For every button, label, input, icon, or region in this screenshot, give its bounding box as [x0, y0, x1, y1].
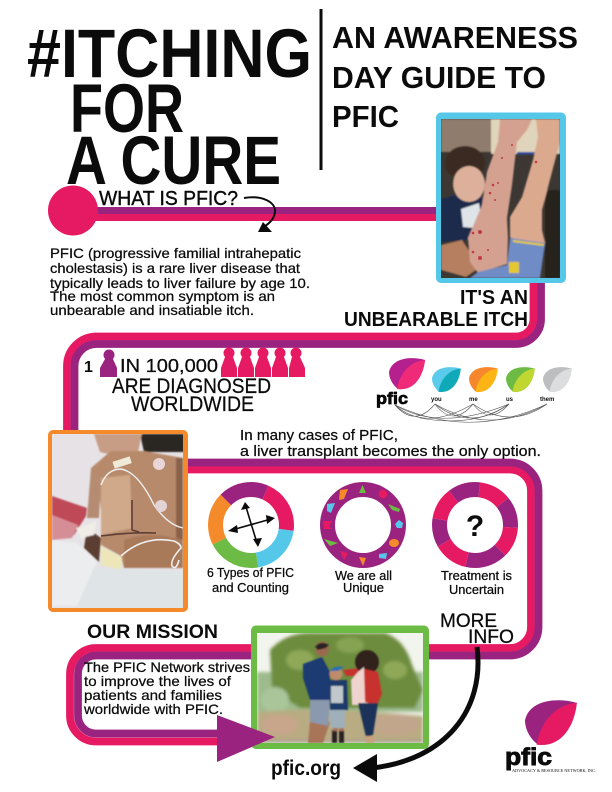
ring: 6 types: 6 Types of PFIC	[207, 566, 294, 580]
subtitle: AN AWARENESS	[332, 20, 578, 55]
text block: PFIC description: cholestasis) is a rare liver disease that	[50, 260, 300, 276]
text block: PFIC description	[50, 245, 310, 318]
statistic: 1 in 100,000: IN 100,000	[120, 356, 218, 376]
heading: it's an unbearable itch: UNBEARABLE ITCH	[344, 309, 528, 331]
logo: PFIC you me us them: pfic	[376, 389, 408, 408]
icon: purple person	[100, 350, 117, 377]
statistic: 1 in 100,000	[84, 348, 305, 416]
subtitle: PFIC	[332, 99, 399, 134]
ring: treatment is uncertain: Treatment is	[441, 569, 512, 583]
heading: more info: INFO	[468, 627, 514, 648]
ring: 6 types: and Counting	[212, 581, 289, 595]
statistic: 1 in 100,000: ARE DIAGNOSED	[112, 375, 271, 398]
ring: treatment is uncertain: Uncertain	[449, 583, 504, 597]
statistic: 1 in 100,000: 1	[84, 359, 93, 376]
logo: PFIC you me us them	[376, 358, 572, 422]
text block: transplant: In many cases of PFIC,	[240, 427, 398, 444]
ribbon: what is PFIC to first photo	[48, 186, 438, 236]
ring: we are all unique: We are all	[335, 569, 392, 583]
heading: what is PFIC: WHAT IS PFIC?	[99, 188, 238, 210]
text block: transplant: a liver transplant becomes the only option.	[240, 443, 541, 460]
statistic: 1 in 100,000: WORLDWIDE	[131, 393, 254, 416]
photo: boy with itchy legs	[436, 112, 566, 283]
logo: PFIC Advocacy and Resource Network	[505, 700, 596, 774]
arrow: ribbon arrowhead	[217, 715, 275, 762]
logo: PFIC Advocacy and Resource Network: ADVOCACY & RESOURCE NETWORK, INC.	[512, 768, 596, 774]
link: pfic.org: pfic.org	[271, 757, 341, 780]
heading: more info	[440, 611, 514, 648]
text block: mission: to improve the lives of	[84, 673, 231, 689]
subtitle	[332, 20, 578, 134]
ring: we are all unique	[323, 485, 403, 595]
heading: our mission: OUR MISSION	[87, 622, 218, 643]
ring: 6 types	[207, 490, 294, 595]
text block: PFIC description: unbearable and insatiable itch.	[50, 302, 254, 318]
heading: it's an unbearable itch: IT'S AN	[460, 287, 528, 309]
text block: transplant	[240, 427, 541, 460]
ring: we are all unique: Unique	[343, 581, 384, 595]
title: A CURE	[66, 122, 281, 199]
logo: PFIC Advocacy and Resource Network: pfic	[505, 744, 552, 771]
logo: PFIC you me us them: us	[506, 397, 514, 403]
text block: mission: The PFIC Network strives	[84, 659, 250, 675]
photo: child after liver transplant	[48, 430, 188, 612]
ring: treatment is uncertain: ?	[466, 510, 484, 543]
title: #ITCHING	[27, 15, 312, 92]
text block: PFIC description: typically leads to liver failure by age 10.	[50, 275, 310, 291]
title: FOR	[70, 70, 184, 147]
arrow: more info to pfic.org	[353, 647, 478, 782]
text block: PFIC description: The most common symptom is an	[50, 288, 275, 304]
icon: crossed arrows	[228, 502, 275, 547]
title	[27, 15, 312, 199]
logo: PFIC you me us them: them	[540, 397, 554, 403]
heading: more info: MORE	[440, 611, 497, 632]
text block: mission	[83, 659, 250, 717]
logo: PFIC you me us them: you	[431, 397, 442, 403]
heading: it's an unbearable itch	[344, 287, 528, 331]
ring: treatment is uncertain	[440, 490, 512, 597]
text block: PFIC description: PFIC (progressive familial intrahepatic	[50, 245, 301, 261]
ribbon: second photo to family photo and arrow	[70, 462, 538, 742]
logo: PFIC you me us them: me	[469, 397, 478, 403]
icon: small coloured shapes	[323, 485, 403, 566]
text block: mission: worldwide with PFIC.	[83, 701, 223, 717]
ribbon: first photo to second photo	[67, 280, 541, 434]
icon: five pink people	[221, 348, 305, 377]
subtitle: DAY GUIDE TO	[332, 60, 546, 95]
text block: mission: patients and families	[84, 687, 222, 703]
icon: curved arrow	[244, 197, 275, 232]
photo: family outdoors	[251, 626, 429, 749]
